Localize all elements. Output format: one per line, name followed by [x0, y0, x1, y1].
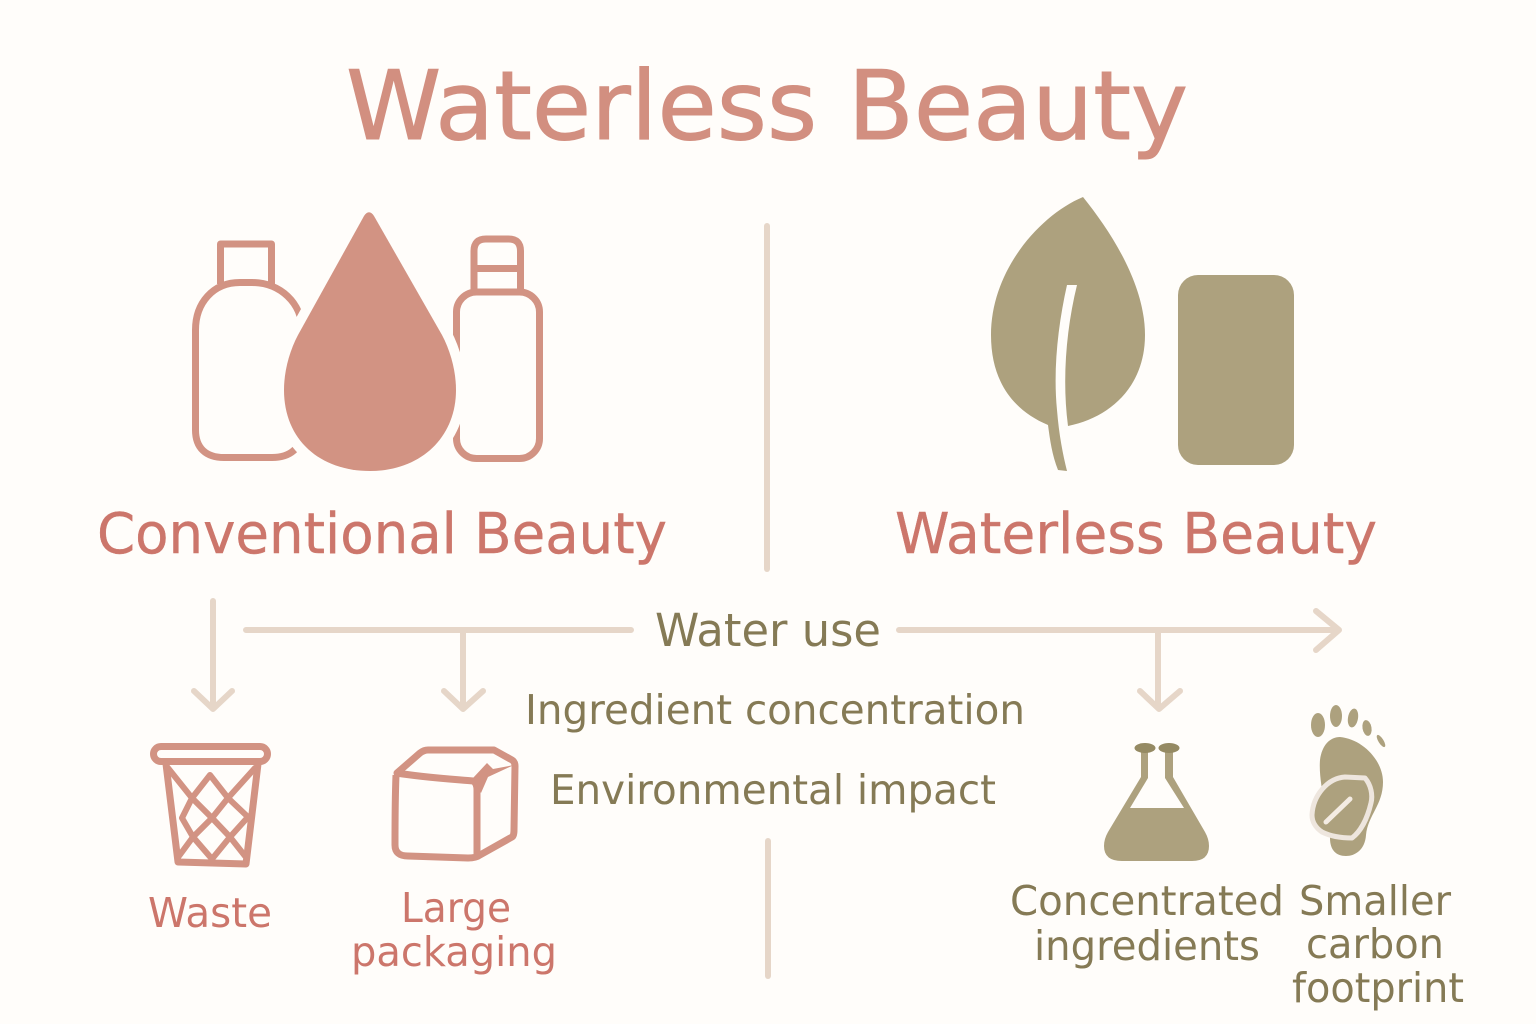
label: water use: Water use: [655, 604, 881, 657]
icon: package box: [395, 750, 515, 858]
label: smaller carbon footprint: footprint: [1292, 964, 1464, 1012]
divider top: [764, 223, 770, 572]
item: concentrated ingredients: [1010, 743, 1284, 970]
label: environmental impact: Environmental impact: [550, 766, 996, 814]
arrow: water use axis right with branch to ingredients: [899, 611, 1339, 709]
icon: leaf and solid bar: [991, 197, 1294, 471]
label: smaller carbon footprint: carbon: [1306, 920, 1444, 968]
panel: waterless beauty: [895, 197, 1377, 567]
label: concentrated ingredients: Concentrated: [1010, 877, 1284, 925]
heading: waterless beauty: Waterless Beauty: [895, 502, 1377, 567]
label: large packaging: Large: [401, 884, 511, 932]
label: waste: Waste: [148, 889, 272, 937]
item: large packaging: [351, 750, 557, 976]
label: ingredient concentration: Ingredient concentration: [525, 686, 1025, 734]
label: smaller carbon footprint: Smaller: [1299, 877, 1451, 925]
heading: conventional beauty: Conventional Beauty: [97, 502, 667, 567]
label: large packaging: packaging: [351, 928, 557, 976]
label: concentrated ingredients: ingredients: [1034, 922, 1260, 970]
panel: conventional beauty: [97, 212, 667, 567]
title: Waterless Beauty: [346, 52, 1188, 162]
icon: conventional bottles and water drop: [196, 212, 540, 471]
icon: waste basket: [154, 746, 268, 864]
item: smaller carbon footprint: [1292, 705, 1464, 1012]
icon: footprint with leaf: [1311, 705, 1387, 856]
icon: flask: [1104, 743, 1209, 861]
divider bottom: [765, 838, 771, 979]
item: waste: [148, 746, 272, 937]
arrow: down to waste: [194, 601, 232, 709]
arrow: water use axis left with branch to packaging: [246, 630, 631, 709]
